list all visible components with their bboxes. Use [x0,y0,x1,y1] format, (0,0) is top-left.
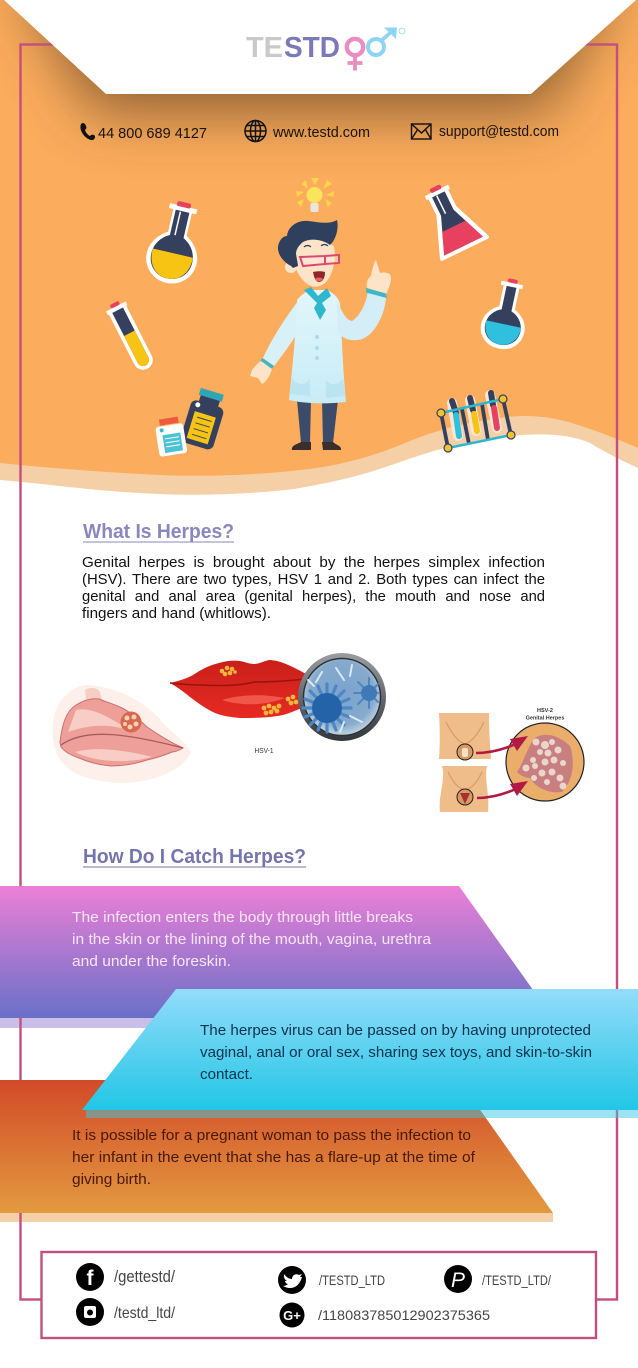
twitter handle: /TESTD_LTD [319,1272,385,1288]
panel: social media box [42,1252,596,1338]
left arm and hand [250,300,303,384]
panel: orange band: It is possible for a pregnant woman to pass the infection to [72,1128,471,1144]
panel: blue band [82,989,638,1118]
icon: pinterest: P [451,1269,465,1292]
icon: test tube rack [437,393,515,452]
shoes [292,442,341,450]
illustration: HSV-2 genital herpes: Genital Herpes [526,716,564,722]
google plus handle: /118083785012902375365 [318,1307,490,1323]
text block: herpes description [82,555,545,622]
logo [246,28,405,70]
icon: google plus: G+ [283,1308,301,1323]
icon: pinterest [444,1265,472,1293]
illustration: HSV-2 genital herpes [439,708,584,812]
ear [285,261,297,273]
icon: facebook: f [86,1267,94,1290]
icon: light bulb [296,178,334,212]
coat buttons and pockets [290,335,345,398]
panel: blue band: vaginal, anal or oral sex, sharing sex toys, and skin-to-skin [200,1045,592,1061]
legs [297,400,338,443]
right arm raised [337,291,386,340]
top shadow under header [15,0,623,112]
illustration: pale lips with cold sore [53,685,190,783]
heading: how do I catch herpes: How Do I Catch Herpes? [83,846,306,868]
glasses [300,255,339,266]
pinterest handle: /TESTD_LTD/ [482,1272,551,1288]
icon: medicine bottles [154,386,229,457]
eyes [304,244,328,247]
band under-shadows [0,1018,553,1222]
panel: orange band: her infant in the event that she has a flare-up at the time of [72,1150,476,1166]
mouth [313,271,325,282]
illustration: magnified virus lens [298,653,386,741]
icon: google plus [280,1302,304,1328]
labels: HSV-2 [537,708,553,714]
arrows [476,743,518,798]
lower torso [440,766,488,812]
icon: globe [245,120,266,142]
logo: STD [284,32,340,64]
website: www.testd.com [272,124,370,141]
header orange background with wave [0,0,638,495]
panel: purple band: in the skin or the lining of the mouth, vagina, urethra [72,932,432,948]
icon: red conical flask [412,176,487,259]
scientist character [250,220,391,450]
icon: instagram [76,1298,104,1326]
panel: blue band: The herpes virus can be passed on by having unprotected [200,1023,591,1039]
icon: envelope [412,124,431,139]
text block: herpes description: (HSV). There are two types, HSV 1 and 2. Both types can infect the [82,572,545,588]
panel: purple band: The infection enters the body through little breaks [72,910,413,926]
label: HSV-1: HSV-1 [254,748,274,755]
text block: herpes description: Genital herpes is brought about by the herpes simplex infection [82,555,545,571]
logo: TE [246,32,283,64]
icon: blue round flask [478,275,534,352]
panel: purple band [0,886,553,1018]
panel: orange band [0,1080,553,1213]
icon: facebook [76,1263,104,1291]
text block: herpes description: fingers and hand (whitlows). [82,606,271,622]
hand pointing [367,260,391,294]
illustration: red lips with sores [170,660,306,718]
email: support@testd.com [439,123,559,140]
upper torso [439,713,491,759]
white logo header trapezoid [4,0,636,94]
contact row [80,120,559,142]
panel: orange band: giving birth. [72,1172,151,1188]
icon: yellow test tube [104,298,157,373]
collar and tie [304,287,331,320]
icon: phone [80,123,95,140]
phone number: 44 800 689 4127 [98,125,207,142]
coat [289,290,346,403]
icon: twitter [278,1266,306,1294]
face [295,239,335,287]
facebook handle: /gettestd/ [114,1267,175,1286]
panel: purple band: and under the foreskin. [72,954,231,970]
hair [278,220,338,268]
panel: blue band: contact. [200,1067,253,1083]
zoom circle [506,723,584,801]
instagram handle: /testd_ltd/ [114,1305,175,1322]
heading: what is herpes: What Is Herpes? [83,521,234,543]
text block: herpes description: genital and anal area (genital herpes), the mouth and nose and [82,589,545,605]
icon: yellow round flask [143,197,208,287]
